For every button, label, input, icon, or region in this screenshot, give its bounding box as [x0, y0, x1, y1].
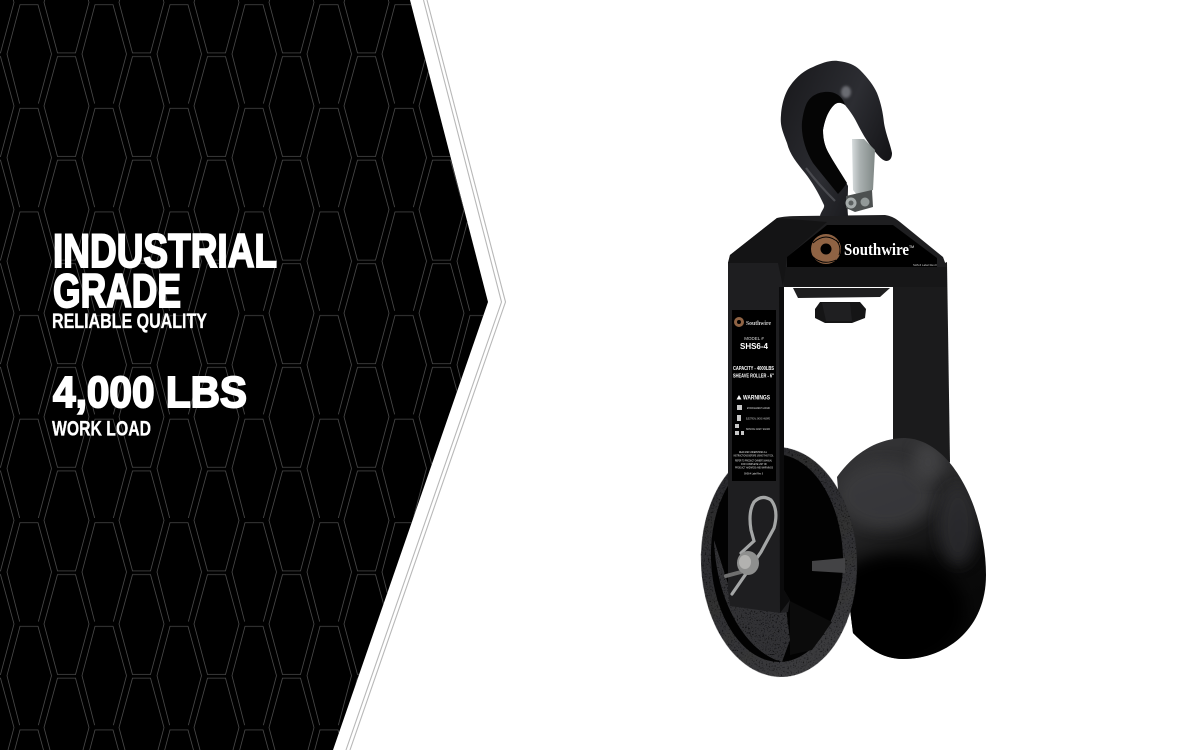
- heading: industrial grade: GRADE: [53, 264, 181, 317]
- cotter pin: [726, 497, 776, 594]
- side specification label: FOR COMPLETE LIST OF: [741, 462, 767, 466]
- logo: copper cable rings: [811, 234, 841, 264]
- side specification label: READ AND UNDERSTAND ALL: [739, 450, 767, 454]
- side specification label: [732, 310, 776, 481]
- side specification label: SHS6-4: [740, 342, 769, 351]
- subheading: reliable quality: RELIABLE QUALITY: [52, 310, 207, 333]
- stat label: work load: WORK LOAD: [52, 418, 151, 440]
- top label with logo: Southwire: [844, 240, 909, 259]
- stat: 4,000 lbs: 4,000 LBS: [53, 368, 247, 417]
- side specification label: Southwire: [746, 320, 771, 327]
- top label with logo: SHS-6 Label Rev.0: [913, 263, 937, 267]
- right arm of frame: [893, 262, 950, 470]
- front flange: [697, 444, 861, 680]
- heading: industrial grade: INDUSTRIAL: [53, 224, 277, 277]
- frame yoke and left arm: [728, 215, 947, 613]
- side specification label: SHEAVE ROLLER - 6": [733, 374, 774, 380]
- product: sheave roller with hook: [697, 61, 986, 680]
- hook safety latch: [846, 139, 875, 212]
- side specification label: PERSONAL SAFETY HAZARD: [746, 427, 770, 431]
- side specification label: INSTRUCTIONS BEFORE USING THIS TOOL: [734, 454, 774, 458]
- top label with logo: [787, 225, 937, 267]
- panel: black hexagon-pattern chevron: [0, 0, 488, 750]
- side specification label: PRODUCT HAZARDS AND WARNINGS: [735, 466, 773, 470]
- side specification label: REFER TO PRODUCT OWNER'S MANUAL: [735, 458, 772, 462]
- side specification label: SHS6-4 Label Rev. 0: [744, 472, 763, 476]
- heading: industrial grade: [53, 224, 277, 317]
- warnings heading: WARNINGS: [743, 394, 771, 402]
- side specification label: CAPACITY - 4000LBS: [733, 366, 775, 372]
- centre nut and plate: [793, 288, 890, 323]
- side specification label: MODEL #: [744, 336, 764, 341]
- chevron outline stripe: [346, 0, 506, 750]
- side specification label: ELECTRICAL SHOCK HAZARD: [746, 416, 770, 420]
- rear flange and spool: [825, 438, 986, 665]
- hook: [781, 61, 892, 216]
- side specification label: ENTANGLEMENT HAZARD: [747, 406, 770, 410]
- top label with logo: TM: [909, 245, 914, 249]
